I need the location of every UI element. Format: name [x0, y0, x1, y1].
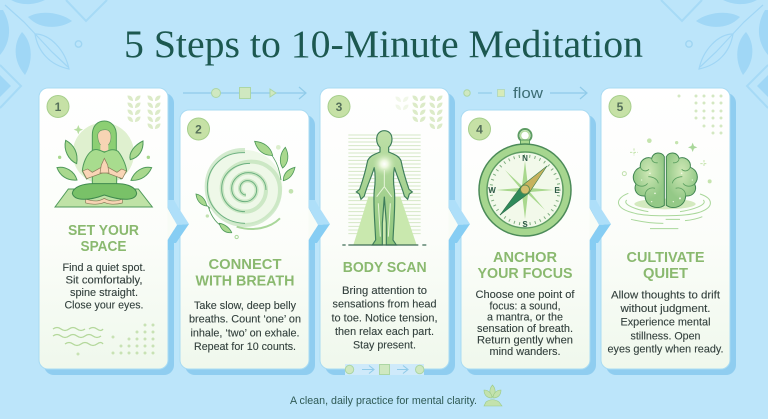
description: sensations from head	[332, 299, 436, 311]
description: inhale, ‘two’ on exhale.	[190, 328, 300, 340]
icon: brain with ripples	[618, 138, 712, 229]
panel: step 5 cultivate quiet	[601, 88, 736, 375]
arrow: step 3 to 4	[448, 200, 470, 250]
description	[189, 300, 301, 353]
description: stillness. Open	[630, 330, 700, 342]
dot pattern	[678, 94, 722, 134]
step number 1: 1	[55, 100, 62, 114]
panel: step 4 anchor your focus	[461, 110, 596, 375]
step number 1	[47, 96, 69, 118]
title: 5 Steps to 10-Minute Meditation	[124, 23, 643, 66]
icon: compass: E	[554, 186, 560, 195]
icon: glowing body scan figure	[342, 131, 426, 245]
step number 3: 3	[336, 100, 343, 114]
description: Allow thoughts to drift	[611, 289, 720, 301]
step number 4	[468, 118, 490, 140]
description: Bring attention to	[342, 285, 427, 297]
heading: SET YOUR	[68, 223, 140, 239]
arrow: step 4 to 5	[590, 200, 611, 250]
heading line 2: YOUR FOCUS	[478, 266, 573, 282]
flow connector: top right with label	[464, 85, 587, 102]
description: Experience mental	[620, 317, 710, 329]
description: without judgment.	[619, 303, 710, 315]
description	[332, 285, 438, 351]
flow connector: top left	[183, 87, 306, 99]
heading: ANCHOR	[493, 250, 558, 266]
heading: BODY SCAN	[343, 260, 427, 276]
heading: CONNECT	[208, 257, 282, 273]
heading: CULTIVATE	[626, 250, 705, 266]
description	[476, 289, 575, 358]
description: a mantra, or the	[487, 312, 563, 324]
description	[62, 262, 146, 312]
step number 2	[188, 118, 210, 140]
description: Find a quiet spot.	[62, 262, 146, 274]
description: spine straight.	[70, 287, 138, 299]
description: to toe. Notice tension,	[332, 312, 438, 324]
icon: compass: S	[522, 220, 528, 229]
sprig pattern	[396, 96, 442, 129]
step number 5: 5	[617, 100, 624, 114]
arrow: step 2 to 3	[308, 200, 330, 250]
description: Take slow, deep belly	[194, 300, 296, 312]
decoration: top-right leaves	[661, 0, 768, 108]
step number 5	[609, 96, 631, 118]
wave and dot decoration	[53, 324, 154, 356]
panel: step 3 body scan	[320, 88, 455, 375]
step number 4: 4	[476, 122, 483, 136]
description: Sit comfortably,	[66, 274, 142, 286]
icon: meditating figure	[55, 121, 152, 207]
panel: step 1 set your space	[39, 88, 174, 375]
description: mind wanders.	[490, 346, 560, 358]
description: Close your eyes.	[64, 300, 144, 312]
icon: sprout	[484, 385, 502, 406]
heading line 2: WITH BREATH	[196, 274, 294, 290]
arrow: step 1 to 2	[168, 200, 189, 250]
flow connector: top right with label: flow	[513, 85, 543, 102]
description: then relax each part.	[335, 326, 434, 338]
tagline: A clean, daily practice for mental clarity.	[290, 395, 477, 407]
heading line 2: QUIET	[643, 266, 688, 282]
icon: compass: N	[522, 154, 528, 163]
description: Stay present.	[353, 339, 416, 351]
description: Return gently when	[477, 334, 573, 346]
description: Repeat for 10 counts.	[194, 341, 296, 353]
step number 2: 2	[195, 122, 202, 136]
panel: step 2 connect with breath	[180, 110, 315, 375]
decoration: top-left leaves	[0, 0, 107, 108]
heading line 2: SPACE	[80, 239, 127, 255]
icon: breath swirl with leaves	[196, 141, 295, 239]
description: breaths. Count ‘one’ on	[189, 314, 301, 326]
icon: compass: W	[488, 186, 496, 195]
description: focus: a sound,	[490, 300, 560, 312]
flow connector: bottom	[345, 364, 424, 375]
description: sensation of breath.	[477, 323, 573, 335]
step number 3	[328, 96, 350, 118]
description: eyes gently when ready.	[608, 344, 724, 356]
icon: compass	[479, 129, 571, 236]
description: Choose one point of	[476, 289, 575, 301]
description	[608, 289, 724, 356]
sprig pattern	[128, 96, 160, 129]
